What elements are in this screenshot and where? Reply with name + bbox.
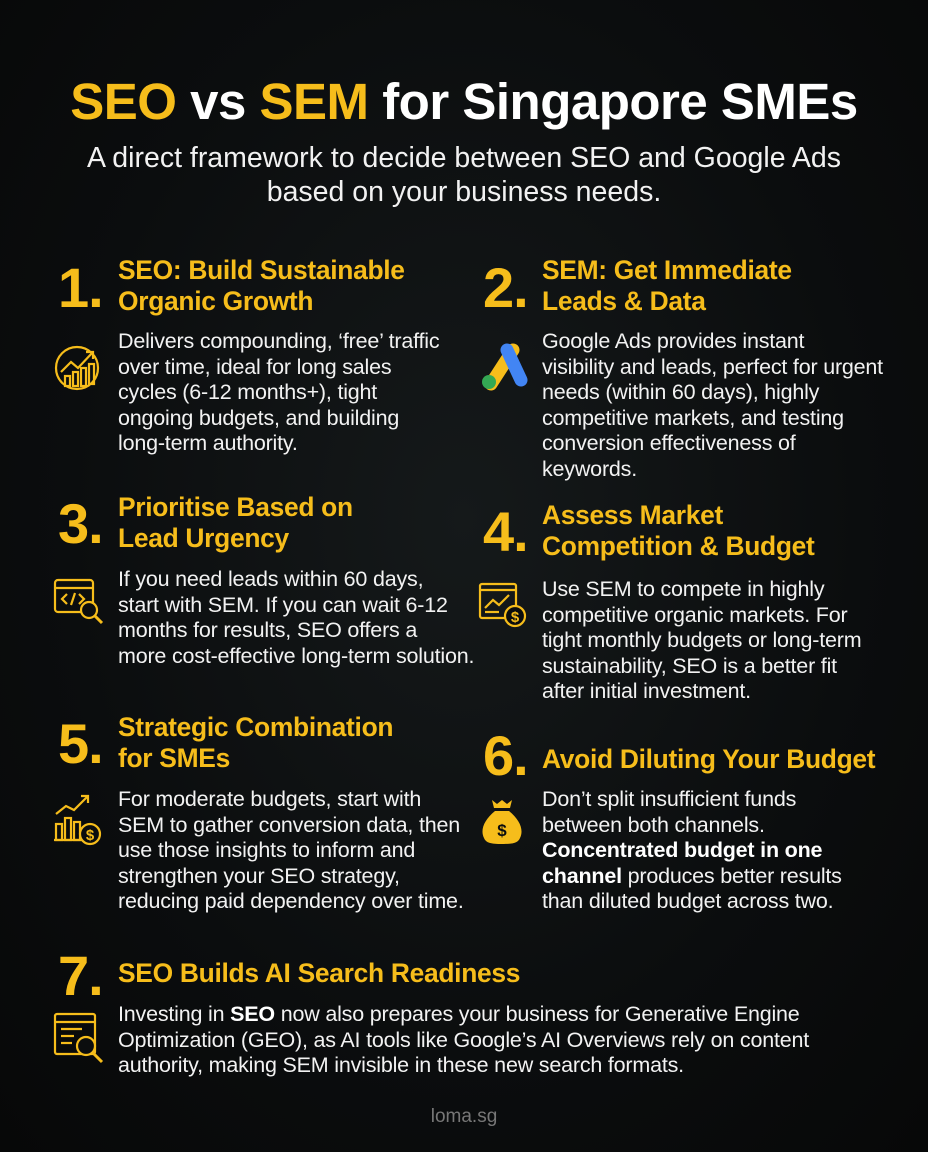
body 4: sustainability, SEO is a better fit (542, 654, 837, 678)
body 2: conversion effectiveness of (542, 431, 796, 455)
heading 7: SEO Builds AI Search Readiness (118, 958, 520, 988)
heading 1: SEO: Build Sustainable (118, 255, 405, 285)
icon: chart with dollar (478, 582, 526, 628)
panel: 1 (54, 255, 439, 455)
body 5 (118, 787, 464, 913)
number 6: 6. (483, 724, 528, 787)
body 4 (542, 577, 861, 703)
icon: bars with dollar: $ (86, 827, 95, 844)
body 1: ongoing budgets, and building (118, 406, 399, 430)
icon: google ads (482, 344, 528, 390)
heading 3: Lead Urgency (118, 523, 289, 553)
heading 1 (118, 255, 405, 316)
body 2: visibility and leads, perfect for urgent (542, 354, 883, 378)
body 2: needs (within 60 days), highly (542, 380, 819, 404)
body 2: competitive markets, and testing (542, 406, 844, 430)
panel: 5 (54, 712, 464, 913)
panel: 3 (54, 492, 474, 668)
icon: browser search (54, 1012, 103, 1063)
heading 5: Strategic Combination (118, 712, 393, 742)
heading 4: Assess Market (542, 500, 723, 530)
body 3: If you need leads within 60 days, (118, 567, 423, 591)
icon: money bag (482, 800, 522, 844)
heading 1: Organic Growth (118, 286, 313, 316)
body 3: more cost-effective long-term solution. (118, 644, 474, 668)
body 7: Investing in SEO now also prepares your business for Generative Engine (118, 1002, 800, 1026)
number 5: 5. (58, 712, 103, 775)
heading 5 (118, 712, 393, 773)
subtitle: based on your business needs. (267, 176, 661, 208)
number 1: 1. (58, 256, 103, 319)
panel: 6 (482, 724, 876, 913)
heading 3: Prioritise Based on (118, 492, 353, 522)
body 1: cycles (6-12 months+), tight (118, 380, 377, 404)
icon: code search (54, 578, 103, 624)
icon: chart with dollar: $ (511, 609, 520, 626)
body 3: months for results, SEO offers a (118, 618, 417, 642)
body 7 (118, 1002, 810, 1077)
subtitle (87, 142, 841, 208)
body 2: keywords. (542, 456, 637, 480)
heading 2 (542, 255, 792, 316)
body 6: Don’t split insufficient funds (542, 787, 796, 811)
body 2: Google Ads provides instant (542, 329, 804, 353)
body 5: strengthen your SEO strategy, (118, 864, 400, 888)
body 5: For moderate budgets, start with (118, 787, 421, 811)
number 2: 2. (483, 256, 528, 319)
subtitle: A direct framework to decide between SEO and Google Ads (87, 142, 841, 174)
body 6: Concentrated budget in one (542, 838, 822, 862)
body 7: Optimization (GEO), as AI tools like Google’s AI Overviews rely on content (118, 1028, 809, 1052)
body 6: than diluted budget across two. (542, 889, 833, 913)
icon: bars with dollar (54, 794, 102, 846)
heading 6: Avoid Diluting Your Budget (542, 744, 875, 774)
panel: 2 (482, 255, 883, 480)
body 1: long-term authority. (118, 431, 298, 455)
heading 5: for SMEs (118, 743, 230, 773)
body 7: authority, making SEM invisible in these new search formats. (118, 1053, 684, 1077)
heading 4 (542, 500, 815, 561)
panel: 4 (478, 500, 861, 703)
number 4: 4. (483, 500, 528, 563)
number 3: 3. (58, 492, 103, 555)
body 4: after initial investment. (542, 679, 751, 703)
body 3: start with SEM. If you can wait 6-12 (118, 592, 448, 616)
heading 4: Competition & Budget (542, 531, 815, 561)
footer: loma.sg (431, 1106, 497, 1127)
body 1: Delivers compounding, ‘free’ traffic (118, 329, 439, 353)
body 2 (542, 329, 883, 480)
title: SEO vs SEM for Singapore SMEs (70, 73, 858, 130)
body 1 (118, 329, 439, 455)
body 4: tight monthly budgets or long-term (542, 628, 861, 652)
body 4: Use SEM to compete in highly (542, 577, 824, 601)
body 3 (118, 567, 474, 668)
heading 2: Leads & Data (542, 286, 706, 316)
body 6 (542, 787, 842, 913)
heading 2: SEM: Get Immediate (542, 255, 792, 285)
number 7: 7. (58, 944, 103, 1007)
body 5: reducing paid dependency over time. (118, 889, 464, 913)
body 6: channel produces better results (542, 864, 842, 888)
body 5: SEM to gather conversion data, then (118, 812, 460, 836)
body 4: competitive organic markets. For (542, 602, 847, 626)
icon: money bag: $ (497, 821, 507, 840)
panel: 7 (54, 944, 810, 1077)
body 1: over time, ideal for long sales (118, 354, 391, 378)
icon: growth chart (54, 346, 100, 390)
body 6: between both channels. (542, 812, 765, 836)
body 5: use those insights to inform and (118, 838, 415, 862)
heading 3 (118, 492, 353, 553)
